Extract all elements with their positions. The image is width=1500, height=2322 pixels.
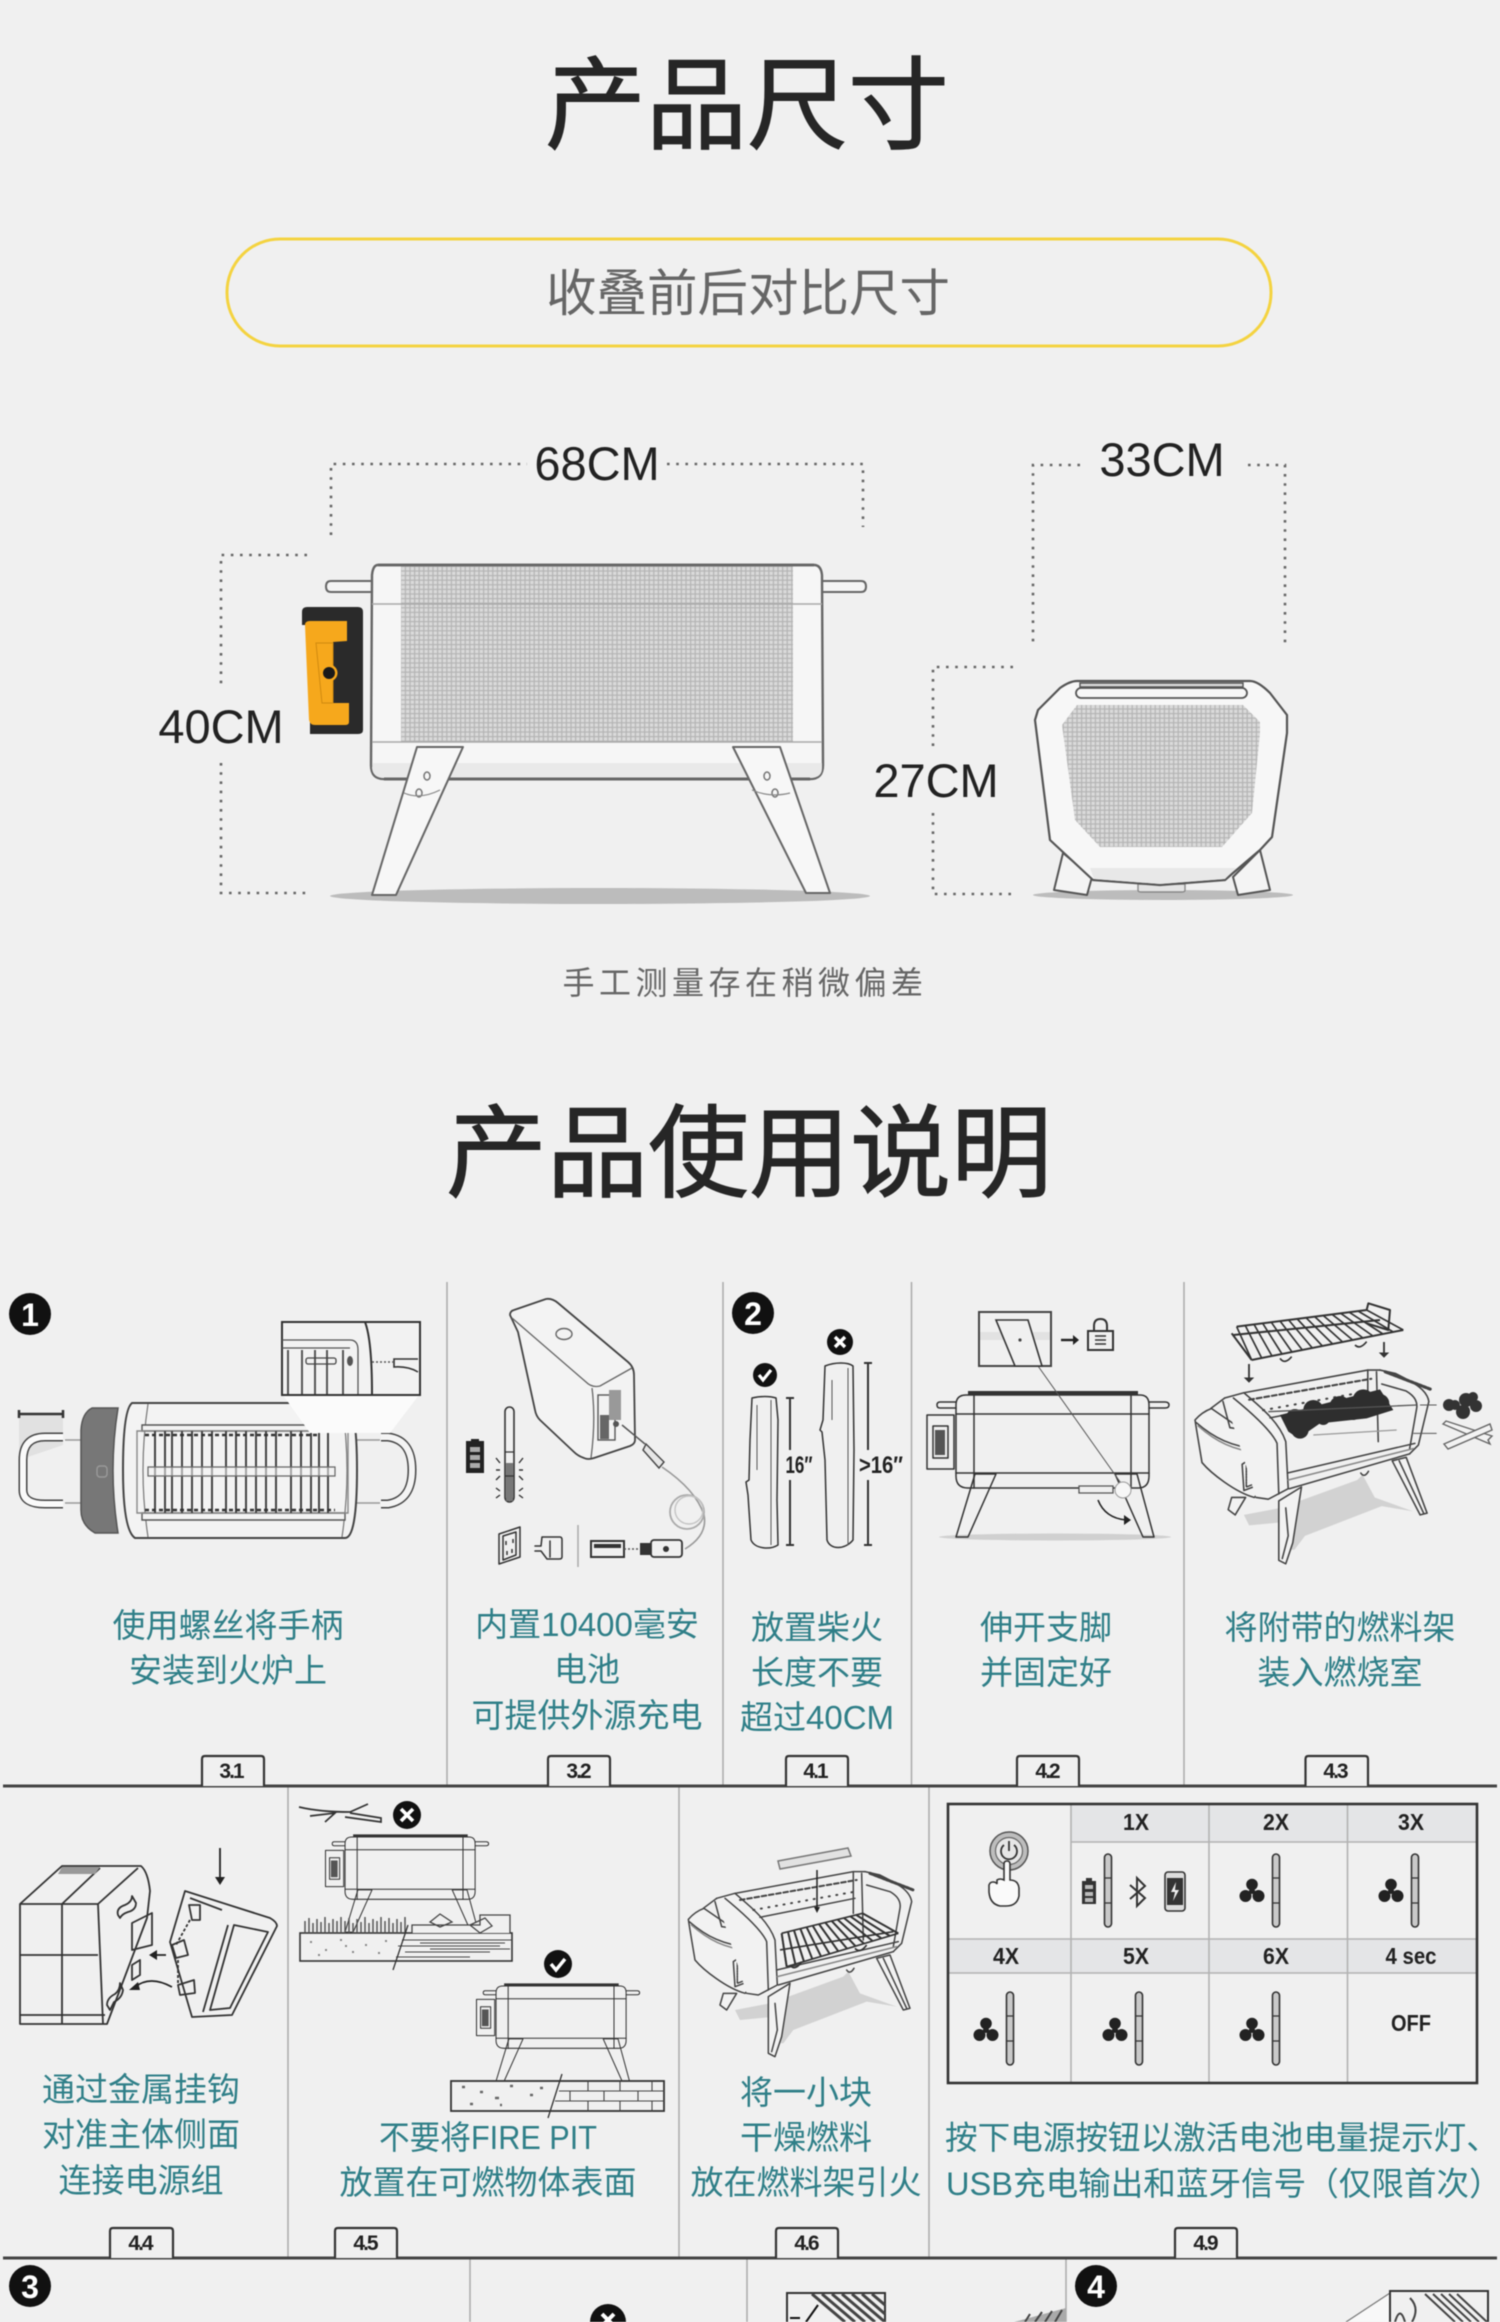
- dimension: height 40CM: 40CM: [158, 700, 284, 753]
- caption 4.6: 干燥燃料: [740, 2119, 872, 2156]
- panel 4.1: log length: [732, 1292, 903, 1786]
- dimension: height 27CM: 27CM: [873, 754, 999, 807]
- illustration: fire pit perspective with charcoal: [1195, 1370, 1437, 1564]
- tag 4.9: 4.9: [1193, 2232, 1218, 2255]
- caption 4.2: 并固定好: [980, 1654, 1112, 1691]
- step badge 4: [1075, 2265, 1117, 2307]
- panel 4.5: surface warning: [299, 1801, 664, 2258]
- caption 4.4: [42, 2071, 240, 2199]
- tag 4.2: 4.2: [1035, 1760, 1060, 1783]
- arrows: attach direction: [129, 1848, 225, 1990]
- caption 4.3: 将附带的燃料架: [1224, 1609, 1456, 1646]
- table of button presses: 4 sec: [1386, 1943, 1437, 1969]
- panel 4.6: kindling: [688, 1848, 922, 2258]
- dimension: height 27CM: [873, 667, 1013, 894]
- tag 3.1: [202, 1756, 264, 1786]
- caption 4.5: [340, 2119, 636, 2201]
- dimension: height 40CM: [158, 555, 309, 893]
- illustration: rack in chamber: [780, 1913, 898, 1968]
- title: 产品使用说明: 产品使用说明: [446, 1099, 1052, 1211]
- panel 3.2: battery and charging: [466, 1299, 705, 1786]
- illustration: fire pit on safe ground: [451, 1985, 664, 2118]
- tag 4.6: 4.6: [794, 2232, 819, 2255]
- step badge 1: [9, 1293, 51, 1335]
- icon: wrong mark, cropped: [590, 2304, 626, 2322]
- caption 3.1: 安装到火炉上: [129, 1652, 327, 1689]
- step badge 3: 3: [21, 2269, 39, 2305]
- icon: 6X fan speed: [1240, 1992, 1280, 2065]
- table of button presses: OFF: [1391, 2010, 1431, 2036]
- illustration: fire pit top view with handles: [19, 1403, 412, 1538]
- dimension: width 68CM: 68CM: [534, 437, 660, 490]
- icon: 1X light bar, bluetooth and phone: [1082, 1854, 1185, 1927]
- pill heading: 收叠前后对比尺寸: [227, 239, 1271, 346]
- inset: grate detail, cropped: [787, 2293, 885, 2322]
- caption 4.4: 对准主体侧面: [42, 2116, 240, 2153]
- note: 手工测量存在稍微偏差: 手工测量存在稍微偏差: [562, 965, 928, 1001]
- tag 4.4: 4.4: [128, 2232, 154, 2255]
- arrow to lock: [1061, 1335, 1079, 1345]
- illustration: fire pit side elevation: [927, 1366, 1171, 1540]
- table of button presses: 6X: [1263, 1943, 1290, 1969]
- tag 4.5: [335, 2228, 397, 2258]
- caption 3.2: 电池: [554, 1651, 620, 1688]
- table of button presses: 5X: [1123, 1943, 1150, 1969]
- icon: charcoal briquettes: [1443, 1392, 1482, 1419]
- icon: wall outlet and adapter: [499, 1527, 562, 1564]
- tag 4.1: [786, 1756, 848, 1786]
- table of button presses: 2X: [1263, 1809, 1290, 1835]
- tag 3.2: 3.2: [566, 1760, 591, 1783]
- icon: correct mark: [544, 1950, 572, 1978]
- illustration: power pack: [170, 1891, 277, 2017]
- caption 4.9: USB充电输出和蓝牙信号（仅限首次）: [946, 2165, 1500, 2202]
- icon: 2X fan speed: [1240, 1854, 1280, 1927]
- panel 4.9: power button table: [945, 1804, 1500, 2258]
- icon: yellow battery pack: [302, 607, 363, 734]
- inset: screw detail: [282, 1322, 420, 1433]
- step badge 2: 2: [744, 1296, 762, 1332]
- caption 4.5: 放置在可燃物体表面: [340, 2164, 636, 2201]
- panel 3.1: handle installation: [9, 1293, 420, 1786]
- icon: correct mark: [753, 1363, 777, 1387]
- caption 3.1: [112, 1607, 344, 1689]
- step badge 4: 4: [1087, 2269, 1105, 2305]
- icon: kindling stick: [778, 1848, 851, 1869]
- step badge 1: 1: [21, 1297, 39, 1333]
- caption 4.1: 长度不要: [751, 1654, 883, 1691]
- caption 3.2: 可提供外源充电: [472, 1697, 702, 1734]
- table of button presses: 4X: [993, 1943, 1020, 1969]
- tag 3.2: [548, 1756, 610, 1786]
- caption 3.1: 使用螺丝将手柄: [112, 1607, 344, 1644]
- illustration: 16 inch log: [746, 1396, 813, 1548]
- step badge 2: [732, 1292, 774, 1334]
- table of button presses: [948, 1804, 1477, 2083]
- panel: unfolded dimensions diagram: [158, 437, 870, 904]
- tag 4.2: [1017, 1756, 1079, 1786]
- panel 4.2: open legs: [927, 1312, 1171, 1786]
- tag 4.6: [776, 2228, 838, 2258]
- panel 4.3: fuel rack: [1195, 1303, 1492, 1786]
- illustration: fire pit front view: [326, 565, 870, 904]
- icon: wrong mark: [393, 1801, 421, 1829]
- icon: 3X fan speed: [1378, 1854, 1418, 1927]
- caption 3.2: [472, 1606, 702, 1734]
- icon: padlock: [1088, 1319, 1113, 1350]
- tag 4.9: [1175, 2228, 1237, 2258]
- icon: 5X fan speed: [1102, 1992, 1142, 2065]
- icon: power button and finger: [989, 1832, 1028, 1906]
- icon: twig: [299, 1804, 381, 1822]
- caption 4.3: 装入燃烧室: [1258, 1654, 1422, 1691]
- tag 4.3: [1306, 1756, 1368, 1786]
- tag 4.3: 4.3: [1323, 1760, 1348, 1783]
- caption 4.6: 将一小块: [740, 2074, 872, 2111]
- step badge 3: [9, 2265, 51, 2307]
- icon: battery level and light bar: [466, 1407, 523, 1502]
- illustration: fuel rack: [1232, 1303, 1403, 1361]
- dimension: width 33CM: [1033, 433, 1285, 646]
- caption 4.2: [980, 1609, 1112, 1691]
- illustration: over 16 inch log: >16″: [859, 1452, 903, 1479]
- caption 4.5: 不要将FIRE PIT: [379, 2119, 597, 2156]
- grid rules of instruction sheet: [3, 1282, 1497, 2322]
- caption 4.6: [690, 2074, 922, 2201]
- pill heading: 收叠前后对比尺寸: 收叠前后对比尺寸: [546, 265, 950, 322]
- caption 4.1: 放置柴火: [751, 1609, 883, 1646]
- inset: leg joint: [979, 1312, 1051, 1366]
- caption 4.1: [740, 1609, 894, 1736]
- caption 4.2: 伸开支脚: [980, 1609, 1112, 1646]
- caption 3.2: 内置10400毫安: [475, 1606, 699, 1643]
- caption 4.4: 连接电源组: [58, 2162, 224, 2199]
- illustration: grate corner, cropped: [1014, 2308, 1066, 2322]
- caption 4.9: [945, 2119, 1500, 2202]
- dimension: width 33CM: 33CM: [1099, 433, 1225, 486]
- arrow: drop kindling: [814, 1870, 820, 1913]
- caption 4.6: 放在燃料架引火: [690, 2164, 922, 2201]
- caption 4.1: 超过40CM: [740, 1699, 894, 1736]
- caption 4.4: 通过金属挂钩: [42, 2071, 240, 2108]
- tag 4.1: 4.1: [803, 1760, 829, 1783]
- icon: 4X fan speed: [974, 1992, 1014, 2065]
- illustration: over 16 inch log: [820, 1363, 903, 1548]
- panel 4.4: attach power pack: [20, 1848, 277, 2258]
- tag 4.4: [110, 2228, 173, 2258]
- panel: step 3 row (cropped): [9, 2265, 1488, 2322]
- icon: crossed firewood: [1443, 1421, 1492, 1449]
- table of button presses: 1X: [1123, 1809, 1150, 1835]
- illustration: fire pit on flammable ground: [300, 1836, 512, 1970]
- inset: step 4 detail, cropped: [1346, 2291, 1488, 2322]
- illustration: battery pack with cable: [510, 1299, 705, 1549]
- caption 4.3: [1224, 1609, 1456, 1691]
- illustration: fire pit end frame: [20, 1866, 152, 2024]
- icon: usb connector: [578, 1525, 682, 1567]
- caption 4.9: 按下电源按钮以激活电池电量提示灯、: [945, 2119, 1499, 2156]
- title: 产品尺寸: 产品尺寸: [545, 51, 949, 163]
- tag 4.5: 4.5: [353, 2232, 379, 2255]
- illustration: fire pit side view: [1033, 681, 1293, 900]
- illustration: fire pit with fuel rack: [688, 1872, 913, 2057]
- panel: folded dimensions diagram: [873, 433, 1293, 900]
- icon: wrong mark: [827, 1329, 853, 1355]
- dimension: width 68CM: [331, 437, 863, 535]
- arrows: rack placement: [1245, 1342, 1388, 1382]
- table of button presses: 3X: [1398, 1809, 1425, 1835]
- tag 3.1: 3.1: [219, 1760, 245, 1783]
- illustration: 16 inch log: 16″: [786, 1452, 813, 1479]
